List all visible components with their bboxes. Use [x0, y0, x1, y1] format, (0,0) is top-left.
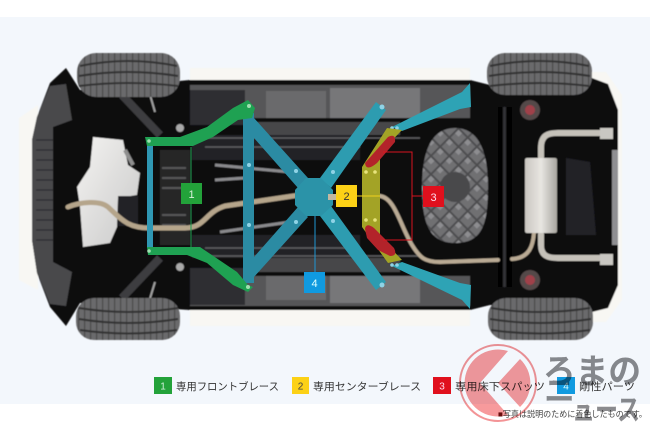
legend	[154, 377, 635, 394]
engine	[77, 137, 140, 247]
legend item 4	[557, 377, 635, 394]
logo mark	[460, 345, 536, 421]
legend item 4: 剛性パーツ	[579, 380, 635, 393]
wheel hubs	[520, 100, 540, 120]
brace 4: rigidity parts (teal)	[147, 83, 471, 309]
callout 1: 1	[188, 189, 195, 201]
front wheels	[77, 53, 180, 97]
legend item 2	[292, 377, 421, 394]
legend item 3: 3	[439, 382, 445, 392]
callout 4: 4	[311, 278, 318, 290]
exhaust pipes	[68, 133, 600, 262]
white body edges	[19, 68, 622, 326]
callout 2	[336, 185, 357, 207]
legend item 1: 1	[160, 382, 166, 392]
floor panels	[190, 85, 470, 306]
heat shield	[422, 128, 488, 243]
rear detail	[566, 158, 596, 235]
logo text: ニ	[544, 374, 575, 409]
logo text: ろまの	[543, 353, 641, 391]
legend item 2: 専用センターブレース	[313, 380, 421, 393]
brace 2: center brace (yellow)	[362, 128, 402, 263]
leader lines	[191, 147, 423, 272]
suspension arms	[122, 95, 160, 298]
callout 4	[304, 272, 325, 293]
watermark logo	[460, 345, 641, 427]
front bumper grey	[32, 84, 72, 306]
legend item 3: 専用床下スパッツ	[455, 381, 545, 393]
legend item 4: 4	[563, 382, 569, 392]
car underbody photo	[19, 53, 622, 340]
callout 3	[423, 186, 444, 207]
rear bar	[498, 107, 512, 287]
muffler	[525, 158, 557, 233]
brace 1: front brace (green)	[145, 100, 255, 292]
callout 2: 2	[343, 191, 350, 203]
callout 3: 3	[430, 192, 437, 204]
callout 1	[181, 183, 202, 204]
logo text	[543, 353, 641, 427]
rear wheels	[487, 53, 592, 95]
legend item 2: 2	[298, 382, 304, 392]
brace 3: floor spats (red patches)	[365, 136, 395, 256]
dark underbody	[32, 68, 618, 326]
legend item 1: 専用フロントブレース	[176, 380, 279, 393]
legend item 1	[154, 377, 279, 394]
legend item 3	[433, 377, 545, 394]
